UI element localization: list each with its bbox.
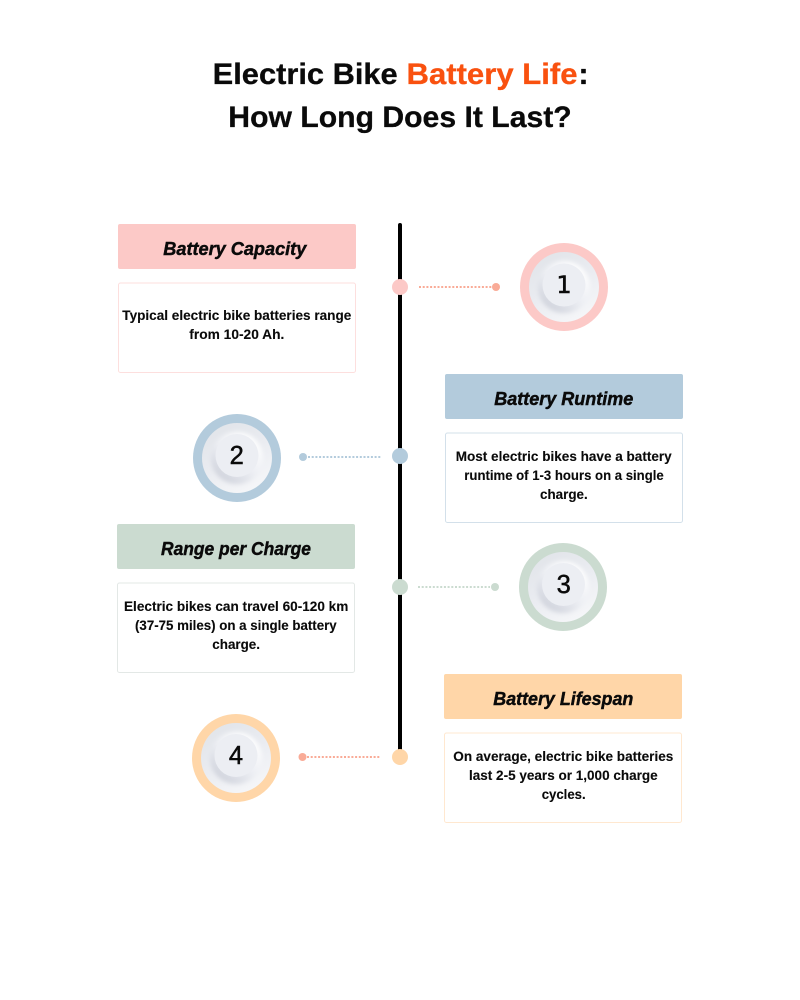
timeline axis <box>398 223 402 753</box>
heading: range per charge: Range per Charge <box>161 539 311 559</box>
marker 1 <box>392 279 500 295</box>
text block: battery runtime: runtime of 1-3 hours on a single <box>464 467 664 483</box>
text block: range per charge <box>118 583 354 672</box>
title: How Long Does It Last? <box>228 101 572 134</box>
text block: range per charge: Electric bikes can travel 60-120 km <box>124 598 348 614</box>
marker 4 <box>298 749 408 765</box>
panel: range per charge <box>117 524 355 672</box>
title: Battery Life <box>406 58 578 91</box>
text block: battery runtime <box>446 433 682 522</box>
badge 3: 3 <box>557 571 571 599</box>
heading: battery runtime <box>445 374 683 419</box>
badge 1: 1 <box>556 271 572 299</box>
heading: battery lifespan: Battery Lifespan <box>493 689 633 709</box>
badge 4: 4 <box>229 742 243 770</box>
panel: battery lifespan <box>444 674 682 822</box>
panel: battery capacity <box>118 224 356 372</box>
marker 2 <box>299 448 408 464</box>
title <box>213 58 588 134</box>
heading: battery capacity: Battery Capacity <box>163 239 307 259</box>
heading: battery runtime: Battery Runtime <box>494 389 633 409</box>
text block: battery lifespan <box>444 733 682 822</box>
heading: range per charge <box>117 524 355 569</box>
text block: battery capacity <box>118 283 356 372</box>
text block: range per charge: charge. <box>212 636 260 652</box>
badge 4 <box>192 714 280 802</box>
badge 2 <box>193 414 281 502</box>
title: Electric Bike <box>213 58 398 91</box>
text block: battery lifespan: last 2-5 years or 1,000 charge <box>469 767 658 783</box>
badge 2: 2 <box>230 442 244 470</box>
title: : <box>578 58 588 91</box>
text block: battery runtime: charge. <box>540 486 588 502</box>
heading: battery lifespan <box>444 674 682 719</box>
text block: battery runtime: Most electric bikes have a battery <box>456 448 672 464</box>
badge 1 <box>520 243 608 331</box>
heading: battery capacity <box>118 224 356 269</box>
text block: battery capacity: from 10-20 Ah. <box>189 326 284 342</box>
marker 3 <box>392 579 499 595</box>
text block: battery lifespan: cycles. <box>542 786 586 802</box>
text block: range per charge: (37-75 miles) on a single battery <box>135 617 337 633</box>
panel: battery runtime <box>445 374 683 522</box>
badge 3 <box>519 543 607 631</box>
text block: battery lifespan: On average, electric bike batteries <box>453 748 673 764</box>
text block: battery capacity: Typical electric bike batteries range <box>122 307 352 323</box>
